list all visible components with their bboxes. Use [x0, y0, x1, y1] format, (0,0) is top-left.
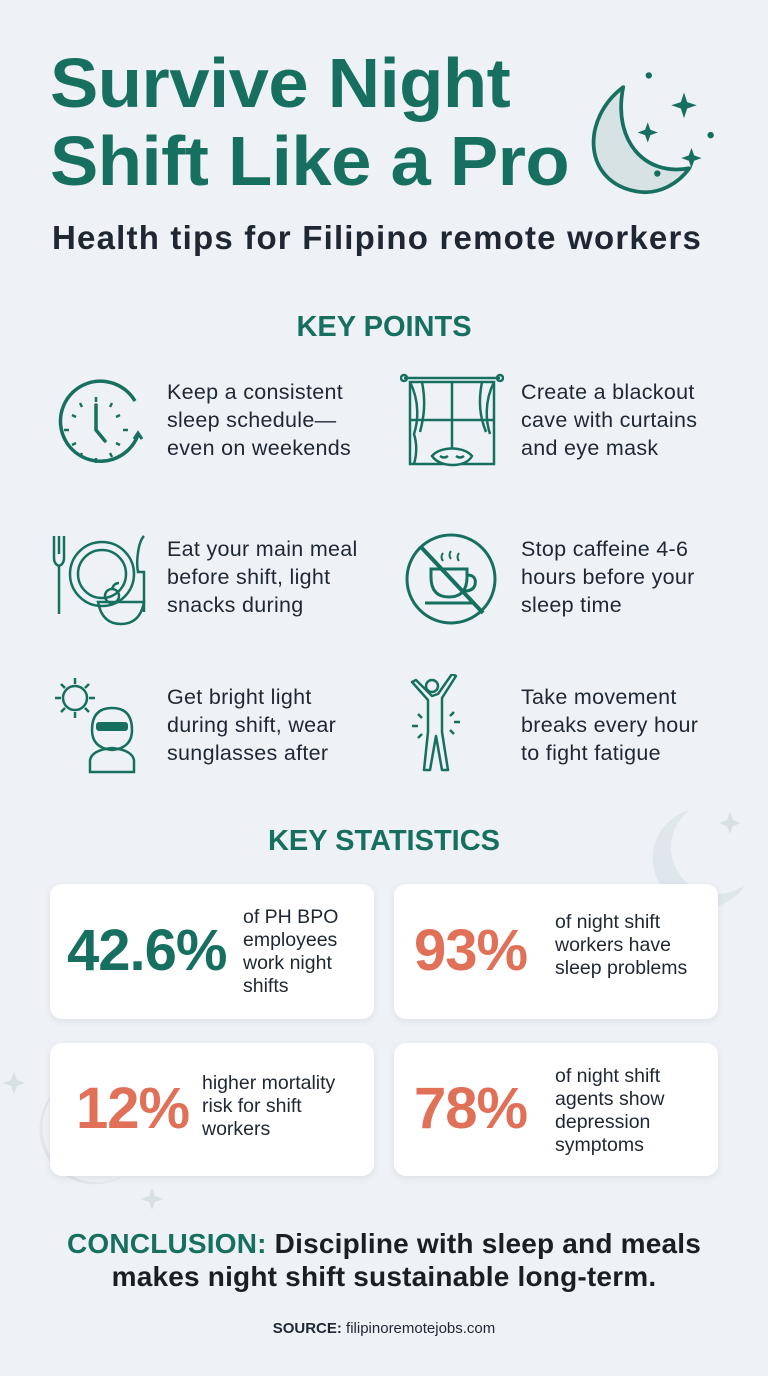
- text: sunglasses after: [167, 741, 328, 765]
- text: depression: [555, 1111, 650, 1133]
- text: work night: [243, 952, 332, 974]
- text: Create a blackout: [521, 380, 695, 404]
- tip 6: [410, 674, 698, 772]
- icon: moon and stars: [592, 72, 714, 194]
- text: [555, 911, 687, 979]
- text: risk for shift: [202, 1095, 302, 1117]
- text: [243, 906, 338, 997]
- tip 3: [52, 535, 358, 626]
- text: of night shift: [555, 1065, 660, 1087]
- text: agents show: [555, 1088, 664, 1110]
- icon: sun and sunglasses: [55, 678, 136, 774]
- text: [521, 685, 698, 765]
- text: during shift, wear: [167, 713, 336, 737]
- decorative moon: right: [652, 810, 744, 906]
- text: [167, 537, 358, 617]
- text: Keep a consistent: [167, 380, 343, 404]
- text: sleep problems: [555, 957, 687, 979]
- text: hours before your: [521, 565, 695, 589]
- stat card 1: [50, 884, 374, 1019]
- text: and eye mask: [521, 436, 658, 460]
- text: shifts: [243, 975, 289, 997]
- text: cave with curtains: [521, 408, 697, 432]
- conclusion: [67, 1228, 701, 1292]
- conclusion: CONCLUSION: Discipline with sleep and meals: [67, 1228, 701, 1259]
- icon: meal: [52, 535, 146, 626]
- text: Eat your main meal: [167, 537, 358, 561]
- text: sleep time: [521, 593, 622, 617]
- source: SOURCE: filipinoremotejobs.com: [273, 1320, 495, 1337]
- subtitle: Health tips for Filipino remote workers: [52, 219, 702, 256]
- number: 42.6%: [67, 918, 226, 983]
- text: [521, 537, 695, 617]
- text: higher mortality: [202, 1072, 335, 1094]
- icon: clock: [58, 379, 144, 463]
- title: Survive Night: [50, 44, 510, 122]
- tip 2: [400, 374, 697, 466]
- icon: curtains and eye mask: [400, 374, 504, 466]
- text: to fight fatigue: [521, 741, 661, 765]
- stat card 4: [394, 1043, 718, 1176]
- tip 1: [58, 379, 351, 463]
- tip 5: [55, 678, 336, 774]
- stat card 3: [50, 1043, 374, 1176]
- heading: key points: KEY POINTS: [296, 311, 472, 343]
- icon: no caffeine: [406, 534, 496, 624]
- conclusion: makes night shift sustainable long-term.: [112, 1261, 656, 1292]
- decorative moon: left: [4, 1072, 162, 1210]
- text: [167, 380, 351, 460]
- text: of night shift: [555, 911, 660, 933]
- text: breaks every hour: [521, 713, 698, 737]
- title: [50, 44, 569, 200]
- text: sleep schedule—: [167, 408, 336, 432]
- text: before shift, light: [167, 565, 330, 589]
- icon: stretching person: [410, 674, 460, 772]
- text: Get bright light: [167, 685, 312, 709]
- heading: key statistics: KEY STATISTICS: [268, 825, 500, 857]
- text: employees: [243, 929, 337, 951]
- tip 4: [406, 534, 695, 624]
- text: [202, 1072, 336, 1140]
- text: even on weekends: [167, 436, 351, 460]
- text: [555, 1065, 664, 1156]
- text: [167, 685, 336, 765]
- number: 93%: [414, 918, 527, 983]
- text: workers: [202, 1118, 270, 1140]
- text: [521, 380, 697, 460]
- title: Shift Like a Pro: [50, 122, 569, 200]
- number: 12%: [76, 1076, 189, 1141]
- text: of PH BPO: [243, 906, 338, 928]
- text: Take movement: [521, 685, 677, 709]
- stat card 2: [394, 884, 718, 1019]
- number: 78%: [414, 1076, 527, 1141]
- text: Stop caffeine 4-6: [521, 537, 688, 561]
- text: symptoms: [555, 1134, 644, 1156]
- text: snacks during: [167, 593, 304, 617]
- text: workers have: [555, 934, 671, 956]
